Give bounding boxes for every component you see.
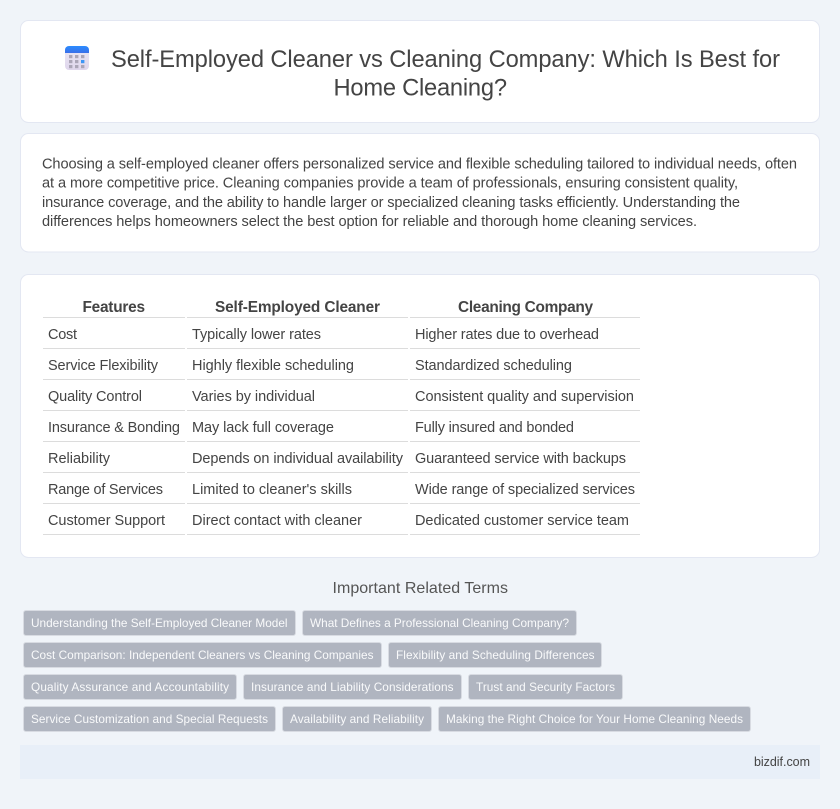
row: service flexibility: Standardized scheduling bbox=[415, 358, 572, 374]
tag bbox=[244, 674, 462, 700]
row: range of services: Range of Services bbox=[48, 482, 163, 498]
row: quality control: Varies by individual bbox=[192, 389, 315, 405]
tag: Flexibility and Scheduling Differences bbox=[396, 648, 595, 662]
row: insurance and bonding bbox=[48, 420, 574, 436]
tag bbox=[24, 642, 382, 668]
tag: What Defines a Professional Cleaning Company? bbox=[310, 616, 569, 630]
row: customer support: Dedicated customer service team bbox=[415, 513, 629, 529]
row: insurance and bonding: Fully insured and bonded bbox=[415, 420, 574, 436]
tag: Quality Assurance and Accountability bbox=[31, 680, 229, 694]
table header row: Self-Employed Cleaner bbox=[215, 299, 380, 316]
row: quality control: Consistent quality and supervision bbox=[415, 389, 634, 405]
row: service flexibility: Service Flexibility bbox=[48, 358, 159, 374]
row: cost: Higher rates due to overhead bbox=[415, 327, 599, 343]
row: range of services: Wide range of specialized services bbox=[415, 482, 635, 498]
heading: important related terms: Important Related Terms bbox=[332, 580, 508, 597]
footer bar bbox=[20, 745, 820, 779]
footer bar: bizdif.com bbox=[754, 755, 810, 769]
row: insurance and bonding: Insurance & Bonding bbox=[48, 420, 180, 436]
panel: header bbox=[20, 20, 820, 122]
tag: Trust and Security Factors bbox=[476, 680, 615, 694]
tag bbox=[24, 610, 296, 636]
row: reliability bbox=[48, 451, 626, 467]
row: reliability: Reliability bbox=[48, 451, 111, 467]
row: cost: Typically lower rates bbox=[192, 327, 321, 343]
row: quality control: Quality Control bbox=[48, 389, 142, 405]
row: service flexibility: Highly flexible scheduling bbox=[192, 358, 354, 374]
tag: Making the Right Choice for Your Home Cleaning Needs bbox=[446, 712, 743, 726]
table header row: Cleaning Company bbox=[458, 299, 593, 316]
panel: comparison table bbox=[20, 274, 820, 558]
row: customer support bbox=[48, 513, 629, 529]
tag bbox=[24, 674, 236, 700]
related term tags bbox=[24, 610, 750, 732]
title: Home Cleaning? bbox=[334, 76, 507, 102]
row: service flexibility bbox=[48, 358, 572, 374]
row: customer support: Direct contact with cleaner bbox=[192, 513, 362, 529]
tag: Service Customization and Special Requests bbox=[31, 712, 268, 726]
row: reliability: Depends on individual availability bbox=[192, 451, 404, 467]
row: reliability: Guaranteed service with backups bbox=[415, 451, 626, 467]
tag bbox=[438, 706, 750, 732]
icon: calendar bbox=[65, 46, 89, 70]
title: Self-Employed Cleaner vs Cleaning Company: Which Is Best for bbox=[111, 47, 780, 73]
panel: introduction text bbox=[20, 134, 820, 252]
tag: Cost Comparison: Independent Cleaners vs Cleaning Companies bbox=[31, 648, 374, 662]
tag bbox=[24, 706, 276, 732]
panel: introduction text: at a more competitive price. Cleaning companies provide a team of professionals, ensuring consistent quality, bbox=[42, 176, 738, 192]
row: range of services: Limited to cleaner's skills bbox=[192, 482, 352, 498]
row: cost: Cost bbox=[48, 327, 77, 343]
tag bbox=[282, 706, 432, 732]
tag bbox=[468, 674, 622, 700]
panel: introduction text: insurance coverage, and the ability to handle larger or specialized cleaning tasks efficiently. Understanding the bbox=[42, 195, 740, 211]
table header row bbox=[82, 299, 593, 316]
tag bbox=[302, 610, 576, 636]
panel: introduction text: Choosing a self-employed cleaner offers personalized service and flexible scheduling tailored to individual needs, often bbox=[42, 156, 797, 172]
panel: introduction text: differences helps homeowners select the best option for reliable and thorough home cleaning services. bbox=[42, 214, 697, 230]
title bbox=[111, 47, 780, 102]
row: quality control bbox=[48, 389, 634, 405]
tag: Availability and Reliability bbox=[290, 712, 424, 726]
row: range of services bbox=[48, 482, 635, 498]
row: customer support: Customer Support bbox=[48, 513, 165, 529]
tag: Insurance and Liability Considerations bbox=[251, 680, 454, 694]
tag bbox=[388, 642, 602, 668]
row: insurance and bonding: May lack full coverage bbox=[192, 420, 334, 436]
table header row: Features bbox=[82, 299, 145, 316]
tag: Understanding the Self-Employed Cleaner Model bbox=[31, 616, 288, 630]
row: cost bbox=[48, 327, 599, 343]
